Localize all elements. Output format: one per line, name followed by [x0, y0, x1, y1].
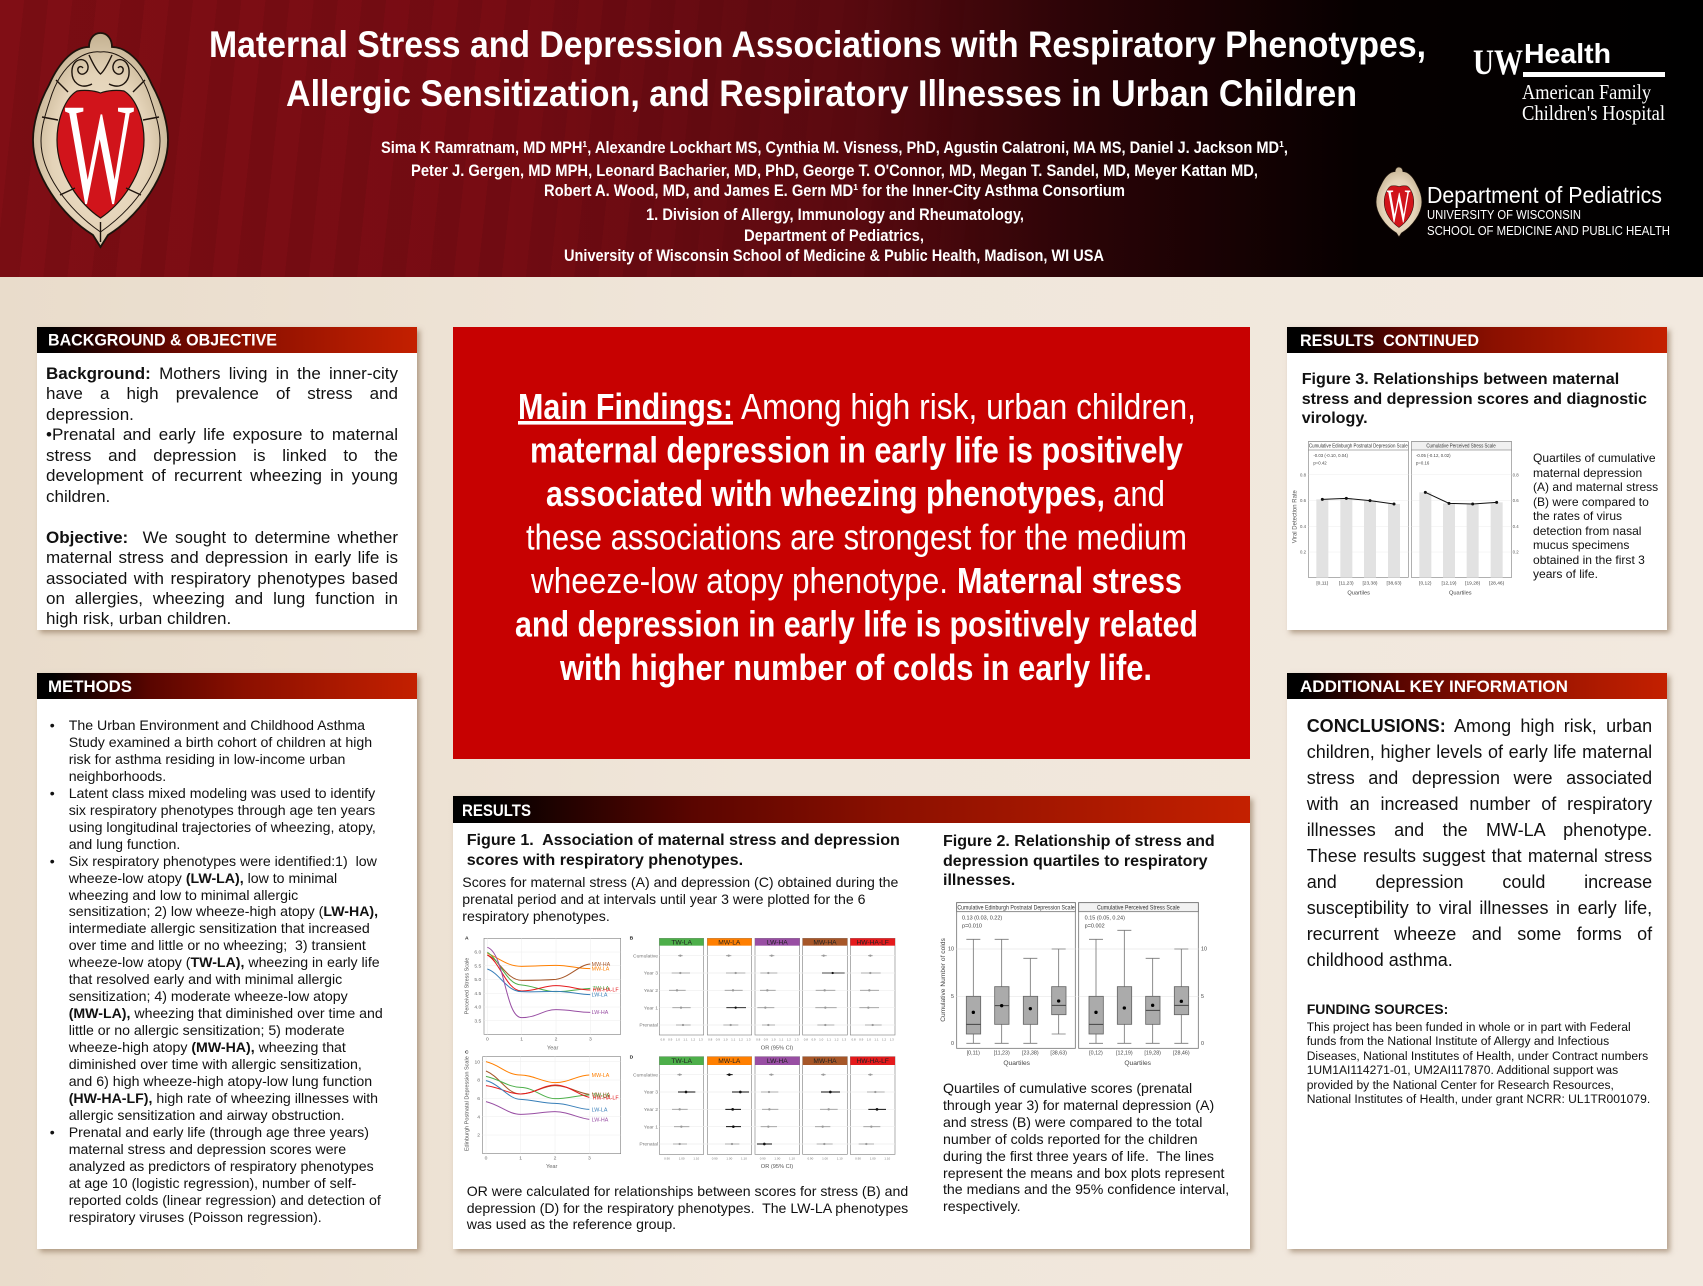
affiliations: University of Wisconsin School of Medicine & Public Health, Madison, WI USA — [564, 247, 1104, 265]
chart: figure 2 box plots: 5 — [951, 994, 954, 1000]
chart: figure 3 virus detection bars: -0.03 (-0.10, 0.04) — [1313, 453, 1349, 458]
heading: figure 2: depression quartiles to respiratory — [943, 852, 1208, 870]
text: methods list: sensitization; 2) low wheeze-high atopy (LW-HA), — [69, 903, 378, 919]
chart: D odds ratios for depression: Prenatal — [639, 1142, 658, 1148]
chart: B odds ratios for stress: Cumulative — [633, 953, 658, 959]
authors: Sima K Ramratnam, MD MPH¹, Alexandre Lockhart MS, Cynthia M. Visness, PhD, Agustin Calatroni, MA MS, Daniel J. Jackson MD¹, — [381, 139, 1288, 157]
chart: C depression line plot: 0 — [485, 1156, 488, 1162]
heading: results — [453, 796, 1250, 823]
text: methods list: The Urban Environment and Childhood Asthma — [69, 717, 365, 733]
chart: B odds ratios for stress: 0.8 0.9 1.0 1.1 1.2 1.3 — [756, 1037, 799, 1041]
text: figure 1 description: Scores for maternal stress (A) and depression (C) obtained during the — [462, 874, 898, 890]
text: methods list: Study examined a birth cohort of children at high — [69, 734, 372, 750]
text: methods list: risk for asthma residing in low-income urban — [69, 751, 345, 767]
chart: D odds ratios for depression — [630, 1054, 895, 1170]
text: main findings statement: and — [1113, 473, 1165, 514]
chart: figure 3 virus detection bars: 0.8 — [1513, 472, 1519, 477]
text: figure 3 description: (A) and maternal stress — [1533, 480, 1658, 494]
chart: figure 2 box plots: [28,46) — [1173, 1050, 1190, 1056]
chart: B odds ratios for stress: 0.8 0.9 1.0 1.1 1.2 1.3 — [804, 1037, 847, 1041]
text: background and objective: maternal stress and depression in early life is — [46, 548, 398, 567]
chart: figure 2 box plots: [11,23) — [994, 1050, 1010, 1056]
chart: figure 3 virus detection bars: [11,23) — [1339, 580, 1354, 586]
logo: UW Health American Family Children's Hospital: American Family — [1522, 80, 1651, 104]
chart: A perceived stress line plot: 5.0 — [474, 977, 482, 983]
chart: B odds ratios for stress: HW-HA-LF — [856, 939, 889, 946]
text: background and objective: stress and depression is linked to the — [46, 446, 398, 465]
chart: B odds ratios for stress: OR (95% CI) — [761, 1045, 793, 1051]
chart: D odds ratios for depression: Year 2 — [644, 1107, 658, 1113]
text: figure 1 description: respiratory phenotypes. — [462, 908, 610, 924]
text: figure 3 description: the rates of virus — [1533, 509, 1622, 523]
text: funding details: This project has been funded in whole or in part with Federal — [1307, 1020, 1631, 1034]
chart: D odds ratios for depression: 0.90 1.00 1.10 — [760, 1156, 795, 1160]
chart: D odds ratios for depression: 0.90 1.00 1.10 — [855, 1156, 891, 1160]
heading: figure 1 — [467, 831, 900, 869]
chart: D odds ratios for depression: Year 1 — [644, 1124, 658, 1130]
panel: results continued — [1287, 327, 1667, 630]
chart: A perceived stress line plot: MW-HA — [592, 962, 611, 968]
chart: D odds ratios for depression: MW-LA — [718, 1058, 741, 1065]
text: background and objective: depression. — [46, 405, 134, 424]
text: methods list: wheeze-low atopy (TW-LA), wheezing in early life — [69, 954, 380, 970]
text: methods list: wheeze-low atopy (LW-LA), low to minimal — [69, 870, 337, 886]
affiliations: Department of Pediatrics, — [744, 227, 924, 245]
chart: figure 3 virus detection bars: [28,46) — [1489, 580, 1505, 586]
chart: C depression line plot: 3 — [588, 1156, 591, 1162]
text: funding details: Diseases, National Institutes of Health, under Contract numbers — [1307, 1049, 1648, 1063]
chart: D odds ratios for depression: TW-LA — [671, 1058, 693, 1065]
text: conclusions: recurrent wheeze and some forms of — [1307, 924, 1652, 944]
text: background and objective: on allergies, wheezing and lung function in — [46, 589, 398, 608]
chart: C depression line plot: 10 — [474, 1059, 480, 1065]
logo text: Department of Pediatrics: UNIVERSITY OF WISCONSIN — [1427, 208, 1581, 222]
text: figure 3 description: maternal depression — [1533, 466, 1642, 480]
chart: figure 2 box plots: [12,19) — [1116, 1050, 1133, 1056]
text: main findings statement: wheeze-low atopy phenotype. — [530, 560, 948, 601]
chart: figure 3 virus detection bars: -0.05 (-0.12, 0.02) — [1416, 453, 1451, 458]
authors: Robert A. Wood, MD, and James E. Gern MD¹ for the Inner-City Asthma Consortium — [544, 182, 1125, 200]
authors: Peter J. Gergen, MD MPH, Leonard Bacharier, MD, PhD, George T. O'Connor, MD, Megan T. Sandel, MD, Meyer Kattan MD, — [411, 162, 1258, 180]
chart: C depression line plot: TW-LA — [593, 1093, 610, 1099]
heading: methods — [37, 673, 417, 699]
chart: figure 3 virus detection bars: 0.2 — [1513, 550, 1519, 555]
chart: B odds ratios for stress: TW-LA — [671, 939, 693, 946]
chart: figure 2 box plots: Cumulative Edinburgh Postnatal Depression Scale — [957, 904, 1075, 911]
heading: results continued — [1287, 327, 1667, 353]
chart: figure 2 box plots: 0.15 (0.05, 0.24) — [1085, 916, 1125, 922]
text: conclusions: and depression could increase — [1307, 872, 1652, 892]
text: figure 2 description: and stress (B) were compared to the total — [943, 1114, 1202, 1130]
chart: figure 2 box plots: p=0.002 — [1085, 924, 1105, 930]
chart: D odds ratios for depression: HW-HA-LF — [856, 1058, 889, 1065]
heading: background and objective — [37, 327, 417, 353]
chart: B odds ratios for stress: Prenatal — [639, 1023, 658, 1029]
text: methods list: that resolved early and with minimal allergic — [69, 971, 342, 987]
chart: A perceived stress line plot: LW-LA — [592, 992, 608, 998]
chart: D odds ratios for depression: 0.90 1.00 1.10 — [712, 1156, 747, 1160]
text: methods list: wheeze-high atopy (MW-HA), wheezing that — [69, 1039, 346, 1055]
affiliations: 1. Division of Allergy, Immunology and Rheumatology, — [646, 206, 1024, 224]
text: odds ratio description: depression (D) for the respiratory phenotypes. The LW-LA phenotypes — [467, 1200, 908, 1216]
panel: methods: • — [50, 717, 55, 733]
panel: results — [453, 796, 1250, 1249]
chart: C depression line plot: 8 — [477, 1078, 480, 1084]
text: background and objective — [46, 364, 398, 628]
chart: B odds ratios for stress: 0.8 0.9 1.0 1.1 1.2 1.3 — [708, 1037, 751, 1041]
chart: figure 2 box plots: 0.13 (0.03, 0.22) — [962, 916, 1002, 922]
text: figure 3 description: years of life. — [1533, 567, 1598, 581]
text: methods list: and lung function. — [69, 836, 180, 852]
icon: university crest: W — [65, 75, 134, 234]
text: main findings statement — [515, 386, 1198, 688]
text: funding details: National Institutes of Health, under grant NCRR: UL1TR001079. — [1307, 1092, 1650, 1106]
header banner — [0, 0, 1703, 277]
text: background and objective: associated with respiratory phenotypes based — [46, 569, 398, 588]
text: methods list: and 6) high wheeze-high atopy-low lung function — [69, 1073, 372, 1089]
chart: C depression line plot: MW-HA — [592, 1092, 611, 1098]
chart: A perceived stress line plot — [465, 936, 621, 1051]
text: methods list: maternal stress and depression scores were — [69, 1141, 346, 1157]
chart: figure 2 box plots: 0 — [951, 1041, 954, 1047]
panel: methods — [37, 673, 417, 1249]
icon: small crest: W — [1387, 181, 1411, 233]
chart: A perceived stress line plot: 3.5 — [474, 1018, 482, 1024]
text: main findings statement: associated with wheezing phenotypes, — [546, 473, 1105, 514]
chart: D odds ratios for depression: MW-HA — [813, 1058, 837, 1065]
chart: B odds ratios for stress: 0.8 0.9 1.0 1.1 1.2 1.3 — [851, 1037, 894, 1041]
text: figure 2 description: during the first three years of life. The lines — [943, 1148, 1214, 1164]
chart: C depression line plot: 6 — [477, 1096, 480, 1102]
chart: A perceived stress line plot: 4.5 — [474, 991, 482, 997]
chart: figure 2 box plots: p=0.010 — [962, 924, 982, 930]
text: funding details — [1306, 1020, 1650, 1106]
text: background and objective: children. — [46, 487, 110, 506]
chart: C depression line plot: 2 — [554, 1156, 557, 1162]
chart: figure 2 box plots: Cumulative Number of colds — [940, 938, 947, 1022]
heading: methods: METHODS — [48, 677, 132, 696]
text: conclusions — [1306, 716, 1652, 970]
chart: A perceived stress line plot: Perceived Stress Scale — [465, 958, 471, 1014]
chart: figure 3 virus detection bars: 0.8 — [1300, 472, 1307, 477]
heading: figure 3: Figure 3. Relationships between maternal — [1302, 370, 1619, 388]
chart: A perceived stress line plot: TW-LA — [593, 986, 610, 992]
chart: A perceived stress line plot: Year — [547, 1045, 558, 1051]
text: methods list: diminished over time with allergic sensitization, — [69, 1056, 362, 1072]
chart: A perceived stress line plot: A — [465, 936, 469, 942]
logo text: Department of Pediatrics: Department of Pediatrics — [1427, 182, 1662, 208]
text: methods list: sensitization; 4) moderate wheeze-low atopy — [69, 988, 348, 1004]
heading: figure 3: stress and depression scores and diagnostic — [1302, 390, 1647, 408]
chart: figure 3 virus detection bars: 0.6 — [1513, 498, 1519, 503]
text: odds ratio description — [466, 1183, 908, 1232]
chart: A perceived stress line plot: MW-LA — [592, 966, 610, 972]
text: conclusions: CONCLUSIONS: Among high risk, urban — [1307, 716, 1652, 736]
chart: figure 2 box plots: Cumulative Perceived Stress Scale — [1097, 904, 1180, 911]
logo: UW Health American Family Children's Hospital: Health — [1524, 38, 1611, 69]
text: funding details: 1UM1AI114271-01, UM2AI117870. Additional support was — [1307, 1063, 1618, 1077]
chart: figure 3 virus detection bars: Cumulative Perceived Stress Scale — [1426, 444, 1496, 450]
text: methods list: Six respiratory phenotypes were identified:1) low — [69, 853, 377, 869]
text: methods list: reported colds (linear regression) and detection of — [69, 1192, 381, 1208]
heading: figure 2: Figure 2. Relationship of stress and — [943, 832, 1215, 850]
chart: figure 3 virus detection bars: p=0.16 — [1416, 461, 1430, 466]
logo text: Department of Pediatrics: SCHOOL OF MEDICINE AND PUBLIC HEALTH — [1427, 224, 1670, 238]
text: main findings statement: Main Findings: — [518, 386, 733, 427]
text: figure 3 description: detection from nasal — [1533, 524, 1641, 538]
text: methods list: at age 10 (logistic regression), number of self- — [69, 1175, 356, 1191]
authors — [381, 139, 1288, 200]
chart: figure 2 box plots: Quartiles — [1124, 1060, 1152, 1067]
text: figure 2 description: Quartiles of cumulative scores (prenatal — [943, 1080, 1192, 1096]
chart: figure 3 virus detection bars: 0.4 — [1513, 524, 1519, 529]
panel: methods: • — [50, 785, 55, 801]
panel: background and objective — [37, 327, 417, 630]
chart: B odds ratios for stress: Year 1 — [644, 1005, 658, 1011]
chart: C depression line plot: Year — [546, 1164, 557, 1170]
chart: A perceived stress line plot: 3 — [589, 1037, 592, 1043]
text: figure 2 description: respectively. — [943, 1198, 1021, 1214]
text: figure 3 description: Quartiles of cumulative — [1533, 451, 1656, 465]
title: Allergic Sensitization, and Respiratory Illnesses in Urban Children — [286, 73, 1357, 114]
chart: A perceived stress line plot: 2 — [555, 1037, 558, 1043]
chart: A perceived stress line plot: 1 — [520, 1037, 523, 1043]
chart: figure 2 box plots: [0,11) — [967, 1050, 980, 1056]
text: figure 1 description — [462, 874, 898, 924]
text: methods list: (HW-HA-LF), high rate of wheezing illnesses with — [69, 1090, 378, 1106]
heading: results: RESULTS — [462, 801, 531, 820]
chart: A perceived stress line plot: 5.5 — [474, 963, 482, 969]
chart: figure 3 virus detection bars: p=0.42 — [1313, 461, 1327, 466]
panel: methods: • — [50, 853, 55, 869]
text: main findings statement: Among high risk, urban children, — [741, 386, 1196, 427]
heading: additional key information: ADDITIONAL KEY INFORMATION — [1300, 677, 1568, 696]
text: background and objective: Objective: We sought to determine whether — [46, 528, 398, 547]
text: odds ratio description: OR were calculated for relationships between scores for stress (B) and — [467, 1183, 908, 1199]
text: funding details: funds from the National Institute of Allergy and Infectious — [1307, 1034, 1609, 1048]
chart: figure 2 box plots — [940, 903, 1207, 1067]
chart: A perceived stress line plot: 4.0 — [474, 1005, 482, 1011]
logo: UW Health American Family Children's Hospital: UW — [1473, 42, 1523, 82]
text: background and objective: have a high prevalence of stress and — [46, 384, 398, 403]
text: methods list: wheezing and low to minimal allergic — [69, 887, 298, 903]
chart: C depression line plot — [465, 1049, 621, 1170]
text: figure 2 description: the medians and the 95% confidence interval, — [943, 1181, 1229, 1197]
chart: figure 3 virus detection bars: 0.4 — [1300, 524, 1307, 529]
chart: figure 3 virus detection bars: [0,11) — [1316, 580, 1329, 586]
chart: figure 2 box plots: [19,28) — [1144, 1050, 1161, 1056]
chart: figure 3 virus detection bars: [38,63) — [1386, 580, 1402, 586]
text: odds ratio description: was used as the reference group. — [467, 1216, 676, 1232]
text: conclusions: These results suggest that maternal stress — [1307, 846, 1652, 866]
chart: figure 3 virus detection bars: [23,38) — [1362, 580, 1378, 586]
chart: D odds ratios for depression: 0.90 1.00 1.10 — [807, 1156, 843, 1160]
text: methods list: respiratory viruses (Poisson regression). — [69, 1209, 322, 1225]
text: methods list: little or no allergic sensitization; 5) moderate — [69, 1022, 345, 1038]
text: conclusions: children, higher levels of early life maternal — [1307, 742, 1652, 762]
chart: figure 2 box plots: 10 — [948, 947, 954, 953]
text: methods list — [50, 717, 383, 1225]
chart: D odds ratios for depression: OR (95% CI) — [761, 1164, 793, 1170]
chart: B odds ratios for stress: Year 2 — [644, 988, 658, 994]
affiliations — [564, 206, 1104, 265]
chart: A perceived stress line plot: 0 — [486, 1037, 489, 1043]
chart: B odds ratios for stress: LW-HA — [767, 939, 788, 946]
text: background and objective: development of recurrent wheezing in young — [46, 466, 398, 485]
chart: figure 3 virus detection bars: [12,19) — [1441, 580, 1457, 586]
text: figure 2 description: represent the means and box plots represent — [943, 1165, 1224, 1181]
heading: results continued: RESULTS CONTINUED — [1300, 331, 1479, 350]
heading: funding sources: FUNDING SOURCES: — [1307, 1001, 1448, 1017]
text: figure 2 description: through year 3) for maternal depression (A) — [943, 1097, 1214, 1113]
text: background and objective: •Prenatal and early life exposure to maternal — [46, 425, 398, 444]
chart: C depression line plot: Edinburgh Postnatal Depression Scale — [465, 1056, 471, 1151]
chart: B odds ratios for stress: MW-LA — [718, 939, 741, 946]
chart: figure 3 virus detection bars: [19,28) — [1465, 580, 1481, 586]
panel: methods: • — [50, 1124, 55, 1140]
text: conclusions: susceptibility to viral illnesses in early life, — [1307, 898, 1652, 918]
chart: A perceived stress line plot: 6.0 — [474, 950, 482, 956]
text: figure 2 description — [943, 1080, 1229, 1214]
text: figure 3 description: (B) were compared to — [1533, 494, 1649, 508]
text: methods list: Prenatal and early life (through age three years) — [69, 1124, 369, 1140]
chart: B odds ratios for stress: 0.8 0.9 1.0 1.1 1.2 1.3 — [660, 1037, 703, 1041]
text: methods list: allergic sensitization and airway obstruction. — [69, 1107, 345, 1123]
chart: D odds ratios for depression: D — [630, 1054, 634, 1060]
chart: figure 2 box plots: [0,12) — [1089, 1050, 1103, 1056]
chart: C depression line plot: LW-HA — [592, 1117, 609, 1123]
chart: figure 3 virus detection bars: 0.2 — [1300, 550, 1307, 555]
panel: additional key information — [1287, 673, 1667, 1249]
chart: D odds ratios for depression: 0.90 1.00 1.10 — [664, 1156, 700, 1160]
chart: C depression line plot: MW-LA — [592, 1073, 610, 1079]
chart: A perceived stress line plot: LW-HA — [592, 1010, 609, 1016]
chart: figure 3 virus detection bars: Viral Detection Rate — [1293, 489, 1299, 543]
chart: C depression line plot: LW-LA — [592, 1108, 608, 1114]
chart: B odds ratios for stress: MW-HA — [813, 939, 837, 946]
text: conclusions: stress and depression were associated — [1307, 768, 1652, 788]
text: methods list: intermediate allergic sensitization that increased — [69, 920, 370, 936]
text: conclusions: childhood asthma. — [1307, 950, 1453, 970]
text: methods list: using longitudinal trajectories of wheezing, atopy, — [69, 819, 376, 835]
text: conclusions: illnesses and the MW-LA phenotype. — [1307, 820, 1652, 840]
chart: C depression line plot: HW-HA-LF — [593, 1096, 619, 1102]
logo: UW Health American Family Children's Hospital: Children's Hospital — [1522, 101, 1665, 125]
chart: B odds ratios for stress: Year 3 — [644, 971, 658, 977]
chart: figure 2 box plots: 0 — [1201, 1041, 1204, 1047]
text: funding details: provided by the National Center for Research Resources, — [1307, 1078, 1614, 1092]
heading: figure 1: Figure 1. Association of maternal stress and depression — [467, 831, 900, 849]
chart: C depression line plot: C — [465, 1049, 469, 1055]
chart: figure 3 virus detection bars: 0.6 — [1300, 498, 1307, 503]
chart: figure 2 box plots: 10 — [1201, 947, 1207, 953]
chart: figure 2 box plots: [23,38) — [1022, 1050, 1039, 1056]
chart: C depression line plot: 1 — [519, 1156, 522, 1162]
chart: figure 2 box plots: [38,63) — [1050, 1050, 1067, 1056]
chart: A perceived stress line plot: HW-HA-LF — [593, 988, 619, 994]
title — [209, 24, 1426, 114]
panel: main findings — [453, 327, 1250, 759]
text: background and objective: high risk, urban children. — [46, 609, 231, 628]
text: figure 3 description: mucus specimens — [1533, 538, 1629, 552]
text: figure 1 description: prenatal period and at intervals until year 3 were plotted for the 6 — [462, 891, 865, 907]
icon: small crest — [1376, 167, 1422, 237]
text: methods list: neighborhoods. — [69, 768, 166, 784]
heading: figure 3 — [1302, 370, 1647, 427]
chart: D odds ratios for depression: Cumulative — [633, 1072, 658, 1078]
heading: figure 2: illnesses. — [943, 871, 1015, 889]
chart: figure 3 virus detection bars: Quartiles — [1449, 591, 1472, 597]
text: methods list: over time and little or no wheezing; 3) transient — [69, 937, 366, 953]
text: methods list: six respiratory phenotypes through age ten years — [69, 802, 375, 818]
text: figure 3 description: obtained in the first 3 — [1533, 552, 1645, 566]
heading: additional key information — [1287, 673, 1667, 699]
chart: B odds ratios for stress — [630, 936, 895, 1051]
text: methods list: analyzed as predictors of respiratory phenotypes — [69, 1158, 374, 1174]
chart: figure 3 virus detection bars: Cumulative Edinburgh Postnatal Depression Scale — [1309, 444, 1408, 450]
chart: figure 3 virus detection bars: [0,12) — [1419, 580, 1432, 586]
title: Maternal Stress and Depression Associations with Respiratory Phenotypes, — [209, 24, 1426, 65]
logo text: Department of Pediatrics — [1427, 182, 1670, 238]
text: background and objective: Background: Mothers living in the inner-city — [46, 364, 398, 383]
text: figure 2 description: number of colds reported for the children — [943, 1131, 1198, 1147]
icon: university crest — [33, 33, 168, 247]
heading: figure 2 — [943, 832, 1215, 889]
chart: figure 3 virus detection bars — [1293, 442, 1519, 597]
chart: figure 2 box plots: Quartiles — [1003, 1060, 1031, 1067]
chart: B odds ratios for stress: B — [630, 936, 634, 942]
chart: C depression line plot: 4 — [477, 1114, 480, 1120]
text: main findings statement: with higher number of colds in early life. — [559, 647, 1152, 688]
heading: figure 1: scores with respiratory phenotypes. — [467, 851, 743, 869]
chart: C depression line plot: 2 — [477, 1133, 480, 1139]
text: conclusions: with an increased number of respiratory — [1307, 794, 1652, 814]
text: methods list: Latent class mixed modeling was used to identify — [69, 785, 375, 801]
text: main findings statement: Maternal stress — [957, 560, 1182, 601]
chart: D odds ratios for depression: Year 3 — [644, 1090, 658, 1096]
text: figure 3 description — [1533, 451, 1658, 581]
chart: figure 3 virus detection bars: Quartiles — [1347, 591, 1370, 597]
heading: background and objective: BACKGROUND & OBJECTIVE — [48, 331, 277, 350]
logo: UW Health American Family Children's Hospital — [1473, 38, 1665, 125]
chart: D odds ratios for depression: LW-HA — [767, 1058, 788, 1065]
text: methods list: (MW-LA), wheezing that diminished over time and — [69, 1005, 383, 1021]
chart: figure 2 box plots: 5 — [1201, 994, 1204, 1000]
heading: figure 3: virology. — [1302, 409, 1368, 427]
